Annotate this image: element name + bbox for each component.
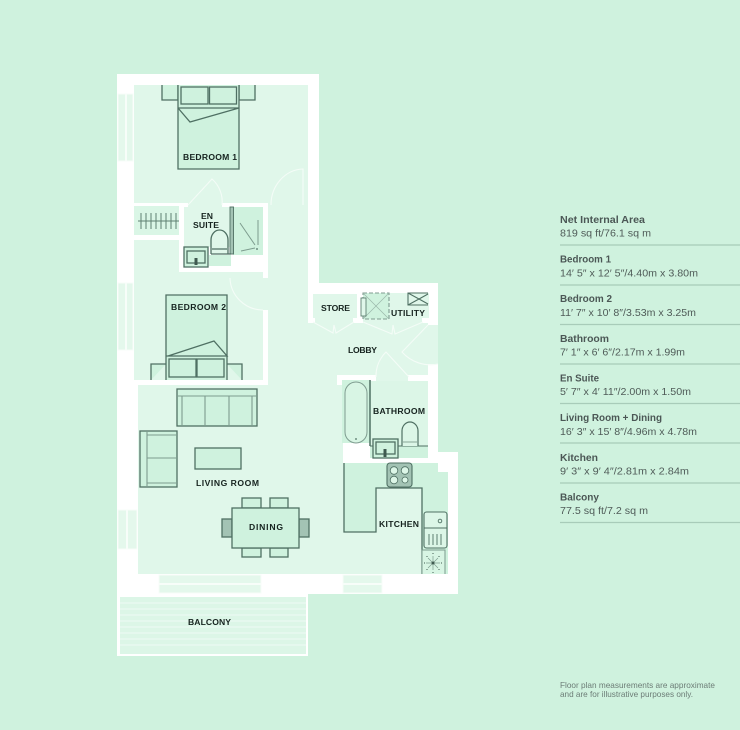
room labels: STORE (321, 303, 350, 313)
bedroom 1 furniture (162, 85, 255, 169)
coffee table (195, 448, 241, 469)
net internal area: Net Internal Area (560, 214, 645, 226)
kitchen size (560, 452, 740, 483)
bedroom 1 size: 14′ 5″ x 12′ 5″/4.40m x 3.80m (560, 268, 698, 280)
kitchen size: Kitchen (560, 452, 598, 464)
footnote: and are for illustrative purposes only. (560, 690, 693, 699)
balcony size: 77.5 sq ft/7.2 sq m (560, 505, 648, 517)
en suite size (560, 372, 740, 404)
floor plan (117, 74, 458, 656)
bathroom size: Bathroom (560, 333, 609, 345)
room labels (171, 152, 425, 627)
bathroom size (560, 333, 740, 364)
wardrobe (134, 206, 179, 235)
icon: oven extractor (422, 550, 445, 574)
net internal area (560, 214, 740, 245)
room labels: LOBBY (348, 345, 377, 355)
room labels: KITCHEN (379, 519, 419, 529)
bathroom size: 7′ 1″ x 6′ 6″/2.17m x 1.99m (560, 346, 685, 358)
bedroom 1 size: Bedroom 1 (560, 254, 611, 266)
footnote: Floor plan measurements are approximate (560, 681, 715, 690)
en suite size: 5′ 7″ x 4′ 11″/2.00m x 1.50m (560, 386, 691, 398)
room labels: BEDROOM 2 (171, 302, 226, 312)
en suite fittings (184, 207, 263, 267)
room labels: EN (201, 211, 213, 221)
kitchen counters and appliances (344, 463, 449, 574)
sofa (177, 389, 257, 426)
panel: room floors (134, 85, 438, 574)
kitchen size: 9′ 3″ x 9′ 4″/2.81m x 2.84m (560, 466, 689, 478)
bathroom fittings (342, 380, 428, 458)
living room and dining size: Living Room + Dining (560, 412, 662, 424)
door swings (188, 169, 438, 377)
footnote (560, 681, 715, 699)
room labels: LIVING ROOM (196, 478, 259, 488)
room labels: SUITE (193, 220, 219, 230)
balcony size (560, 492, 740, 522)
bedroom 2 size: 11′ 7″ x 10′ 8″/3.53m x 3.25m (560, 307, 696, 319)
room labels: BEDROOM 1 (183, 152, 237, 162)
bedroom 1 size (560, 254, 740, 285)
store and utility units (361, 293, 428, 319)
icon: kitchen sink (424, 512, 447, 548)
windows (118, 94, 382, 593)
dining table and chairs (222, 498, 309, 557)
room labels: BATHROOM (373, 406, 425, 416)
living room and dining size (560, 412, 740, 443)
panel: room measurements (560, 214, 740, 522)
balcony size: Balcony (560, 492, 599, 504)
room labels: UTILITY (391, 308, 425, 318)
bedroom 2 size: Bedroom 2 (560, 293, 612, 305)
bedroom 2 size (560, 293, 740, 324)
en suite size: En Suite (560, 372, 599, 384)
armchair (140, 431, 177, 487)
icon: hob (387, 463, 412, 487)
wall outline (117, 74, 458, 594)
balcony (117, 594, 308, 656)
living room and dining size: 16′ 3″ x 15′ 8″/4.96m x 4.78m (560, 426, 697, 438)
bedroom 2 furniture (151, 295, 242, 380)
room labels: DINING (249, 522, 283, 532)
room labels: BALCONY (188, 617, 231, 627)
net internal area: 819 sq ft/76.1 sq m (560, 228, 651, 240)
